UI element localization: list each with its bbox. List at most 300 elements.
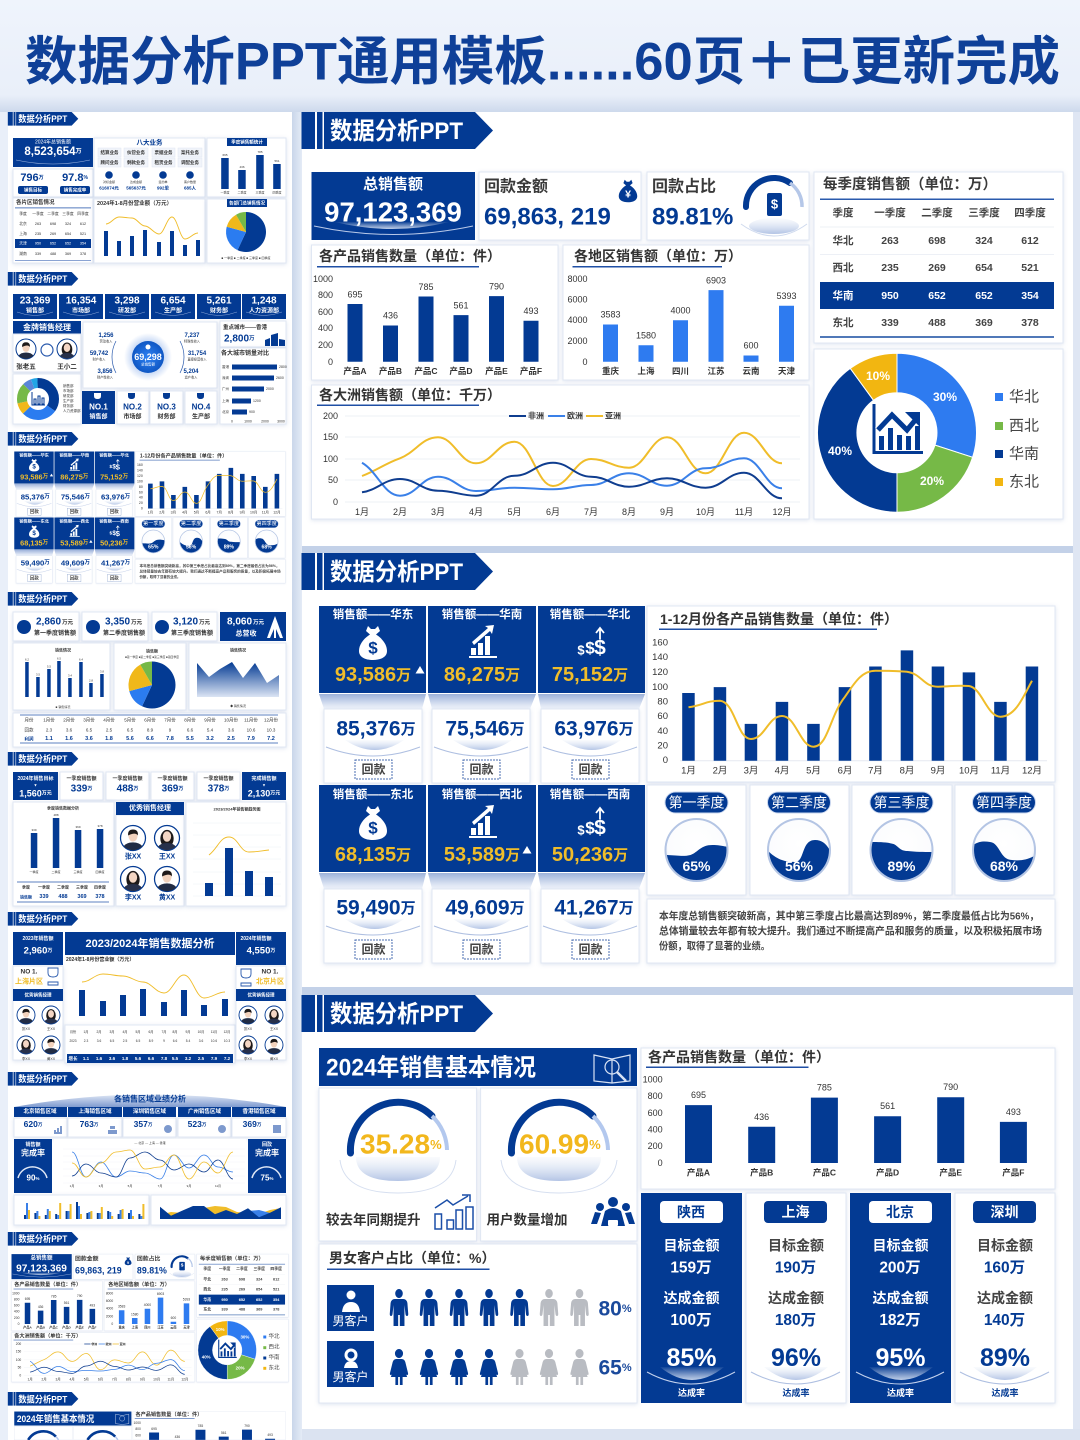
left region managers: 上海片区 xyxy=(15,976,43,986)
multi line chart: 5月 xyxy=(128,1184,132,1188)
quarterly sales table: 950 xyxy=(881,290,899,302)
target cards: 369万 xyxy=(162,784,183,794)
quarterly sales table: 华南 xyxy=(832,289,854,302)
quarter four gauge: 68% xyxy=(990,858,1019,874)
department kpi cards: 3,298 xyxy=(114,296,140,306)
slide header xyxy=(302,995,493,1032)
quarterly bars and table: 销售额 xyxy=(20,894,32,900)
bar chart: 销售情况 xyxy=(55,646,71,652)
city bars: 900 xyxy=(249,410,255,414)
region table: 378 xyxy=(80,252,86,256)
bar chart: 3.4 xyxy=(68,674,72,678)
quarterly sales bars: 三季度 xyxy=(255,190,265,194)
region sales bar chart: 各地区销售额（单位：万） xyxy=(574,248,742,264)
quarter kpi cards: 2,860 xyxy=(36,616,61,628)
region table: 488 xyxy=(50,252,56,256)
payment boxes row 2 xyxy=(324,889,639,963)
monthly table: 7.9 xyxy=(247,736,255,742)
continent sales line chart: 10月 xyxy=(696,507,715,517)
thumbnail header xyxy=(8,912,78,926)
quarter three gauge: 89% xyxy=(887,858,916,874)
income hub xyxy=(83,322,217,388)
icon: gauge with phone xyxy=(741,178,807,236)
city card: Shenzhen: 89% xyxy=(980,1344,1030,1372)
multi line chart: 11月 xyxy=(215,1184,221,1188)
city card: Shanghai: 目标金额 xyxy=(768,1238,824,1254)
department pie xyxy=(207,199,286,263)
center table: 7.8 xyxy=(161,1056,168,1061)
quarterly bars and table: 二季度 xyxy=(51,869,61,874)
female pictogram row xyxy=(390,1349,589,1385)
region sales bar chart: 重庆 xyxy=(602,366,619,376)
city card: Beijing: 目标金额 xyxy=(872,1238,928,1254)
legend: 非洲 xyxy=(528,410,544,420)
quarterly sales table: 季度 xyxy=(832,206,854,219)
monthly combo chart: 2024年1-8月份营业额（万元） xyxy=(97,199,172,207)
quarterly sales table: 西北 xyxy=(832,262,854,274)
income hub: 5,204 xyxy=(183,369,199,375)
ranking cards: NO.2 xyxy=(123,402,142,412)
ranking cards xyxy=(82,391,217,424)
monthly table: 1.8 xyxy=(105,736,113,742)
multi line chart: 9月 xyxy=(187,1184,191,1188)
city card: Beijing: 北京 xyxy=(886,1204,914,1220)
department donut: 销售部 xyxy=(63,383,74,388)
eight business panel: 616074元 xyxy=(99,186,119,192)
eight business panel xyxy=(94,138,205,197)
department kpi cards: 研发部 xyxy=(118,306,136,314)
quarterly sales bars: 785 xyxy=(257,150,263,154)
region table: 北京 xyxy=(19,221,27,226)
department donut: 人力资源部 xyxy=(63,408,81,413)
center table: 8月 xyxy=(173,1030,177,1034)
total sales card xyxy=(13,138,93,167)
quarterly bars and table: 四季度 xyxy=(94,884,106,890)
target cards: 1,560万元 xyxy=(19,788,52,798)
payment completion gauge xyxy=(248,1139,286,1193)
city card: Shaanxi: 达成率 xyxy=(678,1387,705,1398)
growth gauges top xyxy=(14,1426,131,1440)
region table: 521 xyxy=(80,232,86,236)
quarter kpi cards: 8,060 xyxy=(227,616,252,628)
multi line chart: — 北京 — 上海 — 香港 xyxy=(134,1140,166,1145)
quarterly bars and table: 一季度 xyxy=(38,884,50,890)
legend xyxy=(509,410,621,420)
left region managers: 黄XX xyxy=(47,1056,56,1061)
region sales bar chart: 云南 xyxy=(742,366,760,376)
center combo chart xyxy=(66,956,228,1016)
product sales bar chart: 600 xyxy=(318,307,333,317)
region tabs: 357万 xyxy=(134,1119,153,1129)
yearly sales headers: 2023年销售额 xyxy=(22,935,54,942)
monthly table: 3月份 xyxy=(83,716,95,724)
center table: 1.6 xyxy=(96,1056,103,1061)
city bars: 深圳 xyxy=(222,375,229,380)
bar chart: 6.2 xyxy=(25,658,29,662)
continent sales line chart: 6月 xyxy=(546,507,560,517)
department kpi cards xyxy=(13,294,286,319)
monthly table: 8月份 xyxy=(184,716,196,724)
ranking cards: 财务部 xyxy=(157,412,176,420)
quarterly sales table: 一季度 xyxy=(874,206,906,219)
left region managers: 张XX xyxy=(22,1026,31,1031)
eight business panel: 伙管业务 xyxy=(127,149,145,156)
continent sales line chart: 200 xyxy=(323,411,338,421)
monthly table: 1.6 xyxy=(65,736,73,742)
regional cards row 1: 93,586万 xyxy=(335,664,411,686)
gold managers: 金牌销售经理 xyxy=(23,322,71,332)
payment boxes row 2: 41,267万 xyxy=(554,896,634,920)
center table: 3.6 xyxy=(109,1056,116,1061)
income hub: 特殊性收入 xyxy=(184,338,201,344)
product sales bar chart: 785 xyxy=(817,1082,832,1092)
center table: 8.9 xyxy=(149,1039,153,1043)
quarter kpi cards: 3,350 xyxy=(105,616,130,628)
continent sales line chart: 7月 xyxy=(584,507,598,517)
product sales bar chart: 1000 xyxy=(643,1075,663,1085)
product sales bar chart: 产品D xyxy=(449,366,473,376)
thumbnail header xyxy=(8,1392,78,1406)
city bars xyxy=(220,348,287,424)
monthly table: 2.5 xyxy=(227,736,235,742)
product bars top: 各产品销售数量（单位：件） xyxy=(135,1410,202,1418)
sales targets xyxy=(13,169,93,197)
thumbnail header: 数据分析PPT xyxy=(18,753,68,764)
thumbnail slide: regional sales copy xyxy=(8,432,292,592)
growth rate gauge: 35.28% xyxy=(360,1128,442,1160)
monthly table: 1.1 xyxy=(45,736,53,742)
monthly table: 9 xyxy=(169,728,172,732)
key city: 重点城市——香港 xyxy=(223,323,268,331)
left region managers: 优秀销售经理 xyxy=(24,992,52,998)
monthly table: 5月份 xyxy=(124,716,136,724)
monthly product sales combo chart: 80 xyxy=(657,696,668,708)
bar chart xyxy=(13,643,110,710)
target cards: 完成销售额 xyxy=(251,775,277,782)
product sales bar chart: 产品C xyxy=(414,366,438,376)
quarter kpi cards: 第三季度销售额 xyxy=(171,629,213,637)
total sales card: 97,123,369 xyxy=(324,196,462,228)
pie chart: 销售额 xyxy=(146,648,158,654)
center table: 6月 xyxy=(149,1030,153,1034)
quarterly sales table: 东北 xyxy=(832,316,854,329)
quarterly sales bars xyxy=(207,138,286,197)
monthly product sales combo chart: 12月 xyxy=(1022,766,1042,776)
multi line chart: 1月 xyxy=(70,1184,74,1188)
city bars: 香港 xyxy=(222,364,229,369)
quarterly sales table: 488 xyxy=(928,317,946,329)
product sales bar chart: 产品F xyxy=(1002,1168,1025,1178)
page background xyxy=(0,0,1080,112)
quarterly bars and table: 378 xyxy=(97,824,103,828)
monthly product sales combo chart: 2月 xyxy=(713,766,727,776)
city card: Beijing: 182万 xyxy=(879,1312,921,1329)
region share donut chart: 30% xyxy=(933,390,957,404)
male pictogram row xyxy=(390,1289,589,1326)
product sales bar chart: 695 xyxy=(347,289,363,299)
region sales bar chart: 8000 xyxy=(567,274,588,284)
product bars top: 785 xyxy=(198,1424,203,1428)
region share donut chart: 40% xyxy=(828,444,852,458)
continent sales line chart: 12月 xyxy=(772,507,792,517)
monthly table xyxy=(13,713,286,747)
monthly table: 1月份 xyxy=(43,716,55,724)
slide header xyxy=(302,112,493,149)
center table: 7.2 xyxy=(224,1056,231,1061)
sales completion gauge xyxy=(14,1139,52,1193)
monthly product sales combo chart: 7月 xyxy=(868,766,883,776)
product sales bar chart: 400 xyxy=(648,1125,663,1135)
monthly product sales combo chart: 140 xyxy=(652,652,668,663)
quarterly sales table: 378 xyxy=(1021,317,1039,329)
eight business panel: 签约单 xyxy=(158,179,168,184)
product sales bar chart: 产品E xyxy=(485,366,508,376)
department donut xyxy=(13,374,81,424)
monthly table: 2.3 xyxy=(46,728,53,732)
city card: Beijing xyxy=(850,1193,951,1403)
monthly table: 7.2 xyxy=(267,736,275,742)
regional cards row 2: 53,589万 xyxy=(444,844,520,866)
income hub: 直接经营收入 xyxy=(187,356,207,362)
monthly product sales combo chart: 5月 xyxy=(806,766,821,776)
quarterly bars and table: 二季度 xyxy=(57,884,69,890)
target cards: 一季度销售额 xyxy=(112,775,143,782)
center table: 月份 xyxy=(70,1029,77,1034)
region table: 612 xyxy=(80,222,86,226)
slide header: 数据分析PPT xyxy=(330,118,463,145)
regional cards row 2: 50,236万 xyxy=(552,844,628,866)
region tabs xyxy=(14,1107,286,1137)
quarterly bars and table: 369 xyxy=(75,825,81,829)
quarter kpi cards: 万元 xyxy=(131,619,143,626)
pie chart xyxy=(114,643,186,710)
continent sales line chart: 150 xyxy=(323,432,338,442)
monthly table: 利润 xyxy=(24,736,34,742)
sales completion gauge: 销售额 xyxy=(25,1141,41,1148)
excellent managers: 张XX xyxy=(125,852,141,860)
continent sales line chart: 100 xyxy=(323,454,338,464)
quarterly sales table: 652 xyxy=(928,290,946,302)
center table: 10.6 xyxy=(211,1039,217,1043)
female customer block: 男客户 xyxy=(332,1369,369,1384)
thumbnail header: 数据分析PPT xyxy=(18,913,68,924)
sales targets: 销售完成率 xyxy=(64,186,87,194)
monthly table: 2月份 xyxy=(63,716,75,724)
product bars top: 436 xyxy=(175,1435,180,1439)
monthly table: 6.6 xyxy=(187,728,194,732)
city card: Shanghai: 180万 xyxy=(775,1312,816,1329)
quarter two gauge: 56% xyxy=(785,858,814,874)
eight business panel: 客户数量 xyxy=(184,179,196,184)
department pie: ■ 一季度 ■ 二季度 ■ 三季度 ■ 四季度 xyxy=(221,255,271,260)
stacked area chart xyxy=(151,1195,286,1225)
eight business panel: 案托业务 xyxy=(181,149,199,156)
region table: 天津 xyxy=(19,240,27,246)
yearly sales headers: 2023/2024年销售数据分析 xyxy=(86,936,214,950)
ranking cards: NO.1 xyxy=(89,402,108,412)
thumbnail header xyxy=(8,592,78,606)
ranking cards: NO.4 xyxy=(192,402,211,412)
city card: Shenzhen: 140万 xyxy=(984,1312,1025,1329)
eight business panel: 票据业务 xyxy=(154,149,173,156)
region table: 698 xyxy=(50,222,56,226)
icon: dollar signs: $ xyxy=(594,636,606,660)
product sales bar chart: 各产品销售数量（单位：件） xyxy=(319,248,501,264)
slide: sales overview xyxy=(302,112,1073,546)
region table: 一季度 xyxy=(32,211,44,216)
region tabs: 上海销售区域 xyxy=(78,1107,112,1115)
regional cards row 1: 销售额——华北 xyxy=(550,607,631,621)
quarterly bars and table: 488 xyxy=(53,813,59,817)
quarterly sales table: 269 xyxy=(928,262,946,274)
legend: 华北 xyxy=(1009,388,1039,406)
center table: 5.5 xyxy=(172,1056,179,1061)
eight business panel: 达成金额 xyxy=(130,179,142,184)
quarter one gauge: 第一季度 xyxy=(668,794,724,810)
quarter two gauge xyxy=(750,785,849,895)
icon: growth bars xyxy=(469,805,497,838)
female percent: 65% xyxy=(598,1356,632,1380)
icon: dollar signs: $ xyxy=(594,816,606,840)
quarterly bars and table: 季度销售数据分析 xyxy=(47,804,79,810)
region sales bar chart: 0 xyxy=(582,357,588,367)
icon: dollar signs: $ xyxy=(577,642,585,658)
center table: 5.4 xyxy=(186,1039,190,1043)
monthly table: 3.6 xyxy=(85,736,93,742)
continent sales line chart: 8月 xyxy=(622,507,636,517)
region share donut chart: 10% xyxy=(866,369,890,383)
target cards: ▼ xyxy=(34,782,38,788)
target cards: 2,130万元 xyxy=(248,788,280,798)
bar chart: 2.8 xyxy=(89,678,93,682)
icon: growth chart outline xyxy=(435,1195,473,1229)
monthly table: 5.4 xyxy=(207,728,214,732)
multi line chart: 3月 xyxy=(99,1184,103,1188)
left region managers xyxy=(13,966,63,1061)
product sales bar chart: 800 xyxy=(318,290,333,300)
yearly sales headers: 2024年销售额 xyxy=(240,935,272,942)
left region managers: NO 1. xyxy=(21,968,38,976)
ranking cards: 销售部 xyxy=(89,412,108,420)
legend: 亚洲 xyxy=(605,412,621,420)
monthly product sales combo chart: 0 xyxy=(663,755,668,766)
bar chart: 6.5 xyxy=(57,656,61,660)
quarter kpi cards: 第一季度销售额 xyxy=(34,629,76,637)
quarterly bars and table: 三季度 xyxy=(73,869,83,874)
bar chart: 6.4 xyxy=(79,658,83,662)
quarter kpi cards: 总营收 xyxy=(236,628,256,638)
quarterly sales table: 四季度 xyxy=(1014,206,1046,219)
center table: 6.6 xyxy=(173,1039,177,1043)
region table: 354 xyxy=(80,242,86,246)
monthly table: 12月份 xyxy=(264,716,278,724)
payment boxes row 1 xyxy=(324,709,639,783)
monthly product sales combo chart: 3月 xyxy=(744,766,758,776)
female customer block xyxy=(327,1341,374,1387)
income hub: 劳动收入 xyxy=(100,338,113,344)
right region managers: 优秀销售经理 xyxy=(248,992,275,998)
panel: thumbnail column xyxy=(8,112,292,1440)
quarterly sales table xyxy=(814,172,1063,343)
thumbnail header: 数据分析PPT xyxy=(18,593,68,604)
payment ratio card xyxy=(647,172,809,240)
pie chart: ■第一季度 ■第二季度 ■第三季度 ■第四季度 xyxy=(125,655,179,659)
product sales bar chart: 695 xyxy=(691,1090,706,1100)
center table: 1.8 xyxy=(122,1056,129,1061)
department kpi cards: 23,369 xyxy=(20,296,51,306)
region table: 652 xyxy=(50,242,56,246)
center table: 7月 xyxy=(162,1030,166,1034)
total sales card: 总销售额 xyxy=(363,175,423,193)
product sales bar chart: 200 xyxy=(648,1141,663,1151)
male customer block: 男客户 xyxy=(332,1313,369,1328)
monthly table: 7月份 xyxy=(164,716,176,724)
target cards: 一季度销售额 xyxy=(66,775,97,782)
product sales bar chart: 790 xyxy=(489,281,504,291)
thumbnail header: 数据分析PPT xyxy=(18,273,68,284)
regional cards row 1: 销售额——华南 xyxy=(442,607,522,621)
quarterly bars and table: 488 xyxy=(58,894,68,900)
region sales bar chart: 6903 xyxy=(706,275,726,285)
quarterly bars and table: 369 xyxy=(77,894,87,900)
city card: Shaanxi: 85% xyxy=(666,1344,717,1372)
regional cards row 1 xyxy=(319,606,645,709)
slide header: 数据分析PPT xyxy=(330,1001,463,1028)
growth rate gauge: 较去年同期提升 xyxy=(326,1212,420,1228)
region arch heading: 各销售区域业绩分析 xyxy=(114,1094,186,1104)
monthly product sales combo chart: 8月 xyxy=(900,766,914,776)
continent sales line chart: 4月 xyxy=(469,507,483,517)
bar chart: 3.8 xyxy=(100,670,104,674)
monthly product sales combo chart: 10月 xyxy=(959,766,979,776)
city card: Shenzhen: 目标金额 xyxy=(977,1238,1033,1254)
regional cards row 2 xyxy=(319,785,645,889)
product sales bar chart: 产品E xyxy=(939,1168,962,1178)
monthly table: 6月份 xyxy=(144,716,156,724)
thumbnail slide: 2023 vs 2024 xyxy=(8,912,286,1063)
city card: Beijing: 达成金额 xyxy=(872,1290,928,1306)
region sales bar chart: 600 xyxy=(743,341,759,351)
product sales bar chart: 各产品销售数量（单位：件） xyxy=(648,1049,830,1065)
city card: Shenzhen xyxy=(955,1193,1055,1403)
regional cards row 2: 销售额——西南 xyxy=(550,787,630,801)
regional cards row 1: 销售额——华东 xyxy=(333,607,414,621)
quarter kpi cards: 万元 xyxy=(199,619,211,626)
sales completion gauge: 90% xyxy=(27,1174,39,1182)
region table: 324 xyxy=(65,222,71,226)
city card: Shanghai: 上海 xyxy=(782,1204,810,1220)
monthly table: 9月份 xyxy=(204,716,216,724)
center combo chart: 2024年1-8月份营业额（万元） xyxy=(66,956,134,963)
continent sales line chart: 9月 xyxy=(660,507,674,517)
continent sales line chart: 3月 xyxy=(431,507,445,517)
income hub: 总销售额 xyxy=(141,362,155,366)
product sales bar chart: 493 xyxy=(1006,1107,1021,1117)
eight business panel: 剩款业务 xyxy=(127,159,145,166)
summary text xyxy=(647,899,1055,963)
region table: 339 xyxy=(35,252,41,256)
quarter one gauge: 65% xyxy=(682,858,711,874)
yearly sales headers: 2,960万 xyxy=(24,946,52,956)
thumbnail header: 数据分析PPT xyxy=(18,1393,68,1404)
payment ratio card: 回款占比 xyxy=(652,178,716,196)
region tabs: 北京销售区域 xyxy=(23,1107,57,1115)
continent sales line chart: 0 xyxy=(333,497,338,507)
icon: growth chart xyxy=(874,404,923,452)
monthly table: 6.6 xyxy=(146,736,154,742)
area chart: ◆ 销售情况 xyxy=(230,703,246,708)
heading bar: 2024年销售基本情况 xyxy=(17,1413,94,1424)
